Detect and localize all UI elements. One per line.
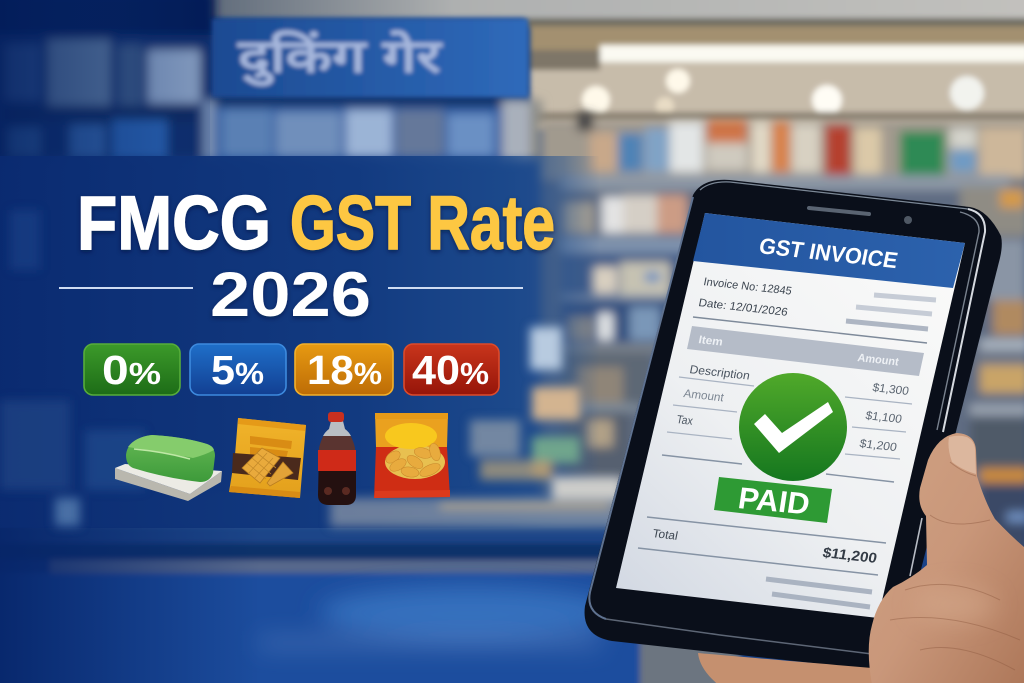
invoice header: GST INVOICE xyxy=(757,233,900,273)
paid stamp xyxy=(714,477,832,523)
table row values: $1,300 xyxy=(871,381,911,398)
invoice details: Invoice No: 12845 xyxy=(702,276,793,298)
paid check circle xyxy=(739,373,847,481)
table row values: $1,200 xyxy=(858,437,899,454)
store sign: दुकिंग गेर xyxy=(237,30,444,86)
thumb nail xyxy=(948,436,976,474)
title: FMCG GST Rate: FMCG xyxy=(77,181,271,266)
subtitle: 2026 with rules: 2026 xyxy=(210,260,371,330)
badge: 0% xyxy=(84,344,180,395)
table row labels: Description xyxy=(688,363,751,383)
speaker and camera xyxy=(809,208,912,224)
table row values xyxy=(858,381,911,454)
darkening overlay at top left xyxy=(0,0,210,156)
icon: cola bottle xyxy=(318,412,356,505)
badge: 18% xyxy=(295,344,393,395)
title: FMCG GST Rate: GST Rate xyxy=(290,181,555,266)
fingers xyxy=(698,653,876,683)
badge: 0%: 0% xyxy=(102,347,161,393)
right shelves and products xyxy=(540,113,1024,553)
badge: 5% xyxy=(190,344,286,395)
badge: 5%: 5% xyxy=(211,347,264,393)
table row labels: Tax xyxy=(675,413,694,428)
total row xyxy=(651,527,878,567)
hand holding phone xyxy=(698,433,1024,683)
store sign xyxy=(212,19,528,97)
table header bar: Item xyxy=(697,334,724,349)
icon: biscuit packet xyxy=(229,418,306,498)
badge: 18%: 18% xyxy=(307,347,382,393)
ceiling and lights xyxy=(205,0,1024,130)
paid stamp: PAID xyxy=(736,482,812,521)
panel blurred shelves showing through xyxy=(0,210,630,527)
phone edge highlights xyxy=(589,182,985,654)
badge: 40%: 40% xyxy=(412,347,489,393)
table header bar xyxy=(687,326,924,376)
table header bar: Amount xyxy=(856,352,900,369)
phone with invoice xyxy=(585,180,1002,672)
icon: snack packet xyxy=(374,413,450,498)
invoice details: Date: 12/01/2026 xyxy=(697,297,789,319)
phone body xyxy=(585,180,1002,672)
decorative invoice lines xyxy=(638,295,936,607)
table row values: $1,100 xyxy=(864,409,904,426)
total row: Total xyxy=(651,527,679,543)
palm and thumb xyxy=(869,433,1024,683)
top-left shelves xyxy=(0,0,542,162)
skin creases xyxy=(890,462,1020,670)
table row labels: Amount xyxy=(682,387,726,404)
left-side darkening xyxy=(0,527,260,683)
counter glow xyxy=(260,586,620,646)
title: FMCG GST Rate xyxy=(77,181,555,266)
total row: $11,200 xyxy=(821,545,878,567)
table row labels xyxy=(675,363,751,428)
screen xyxy=(616,213,965,618)
bottom counter xyxy=(0,495,740,683)
title panel xyxy=(0,156,630,528)
invoice details xyxy=(697,276,793,319)
invoice header xyxy=(693,213,965,288)
skin highlight xyxy=(915,587,995,623)
icon: green soap on dish xyxy=(115,435,222,501)
